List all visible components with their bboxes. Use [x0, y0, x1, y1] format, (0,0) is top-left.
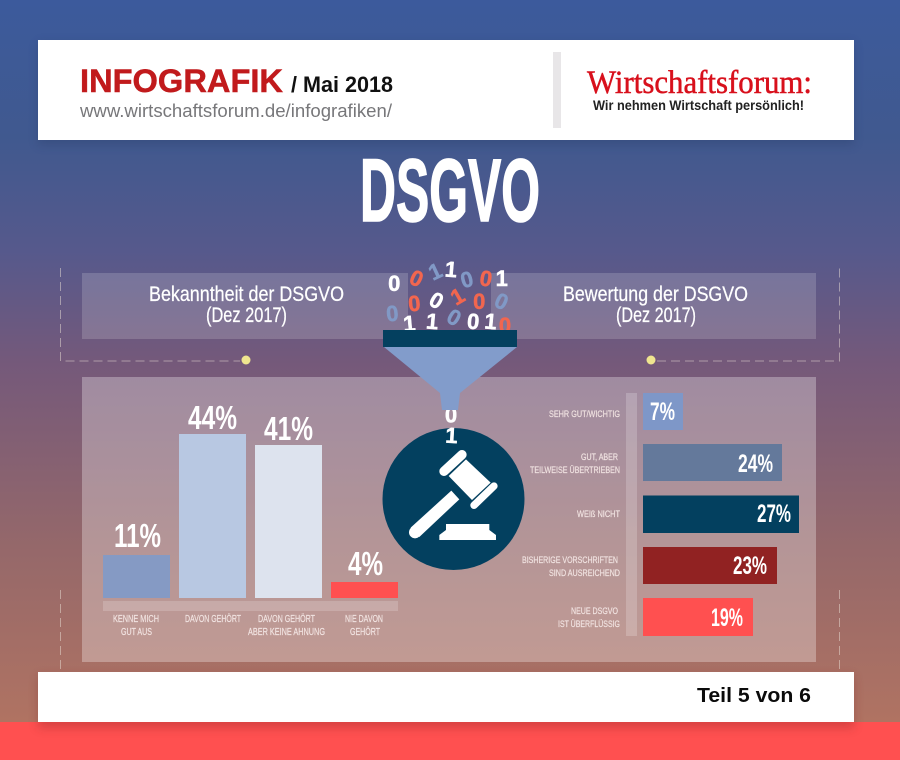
bar: davon gehört aber keine ahnung: 41% [264, 410, 313, 447]
binary digits above funnel: 0 [473, 289, 485, 314]
bar: davon gehört [179, 399, 246, 625]
falling digits: 0 [445, 402, 457, 427]
panel: heading left: (Dez 2017) [206, 304, 287, 327]
logo tagline: Wir nehmen Wirtschaft persönlich! [593, 97, 804, 113]
bar: gut, aber teilweise übertrieben: 24% [738, 450, 773, 478]
red footer band [0, 722, 900, 760]
icon: gavel [409, 455, 496, 540]
url: www.wirtschaftsforum.de/infografiken/ [79, 101, 392, 121]
binary digits above funnel: 0 [466, 309, 480, 334]
bar: neue dsgvo überflüssig: IST ÜBERFLÜSSIG [558, 619, 620, 630]
bar: weiß nicht [577, 496, 799, 533]
dashed connector lines [60, 265, 840, 672]
title: DSGVO [360, 140, 540, 240]
bar: neue dsgvo überflüssig [558, 598, 753, 636]
falling digits [446, 410, 457, 444]
binary digits above funnel: 0 [406, 265, 427, 292]
binary digits above funnel: 0 [388, 271, 400, 296]
bar: nie davon gehört: 4% [348, 545, 383, 582]
footer panel [38, 672, 854, 728]
binary digits above funnel: 0 [458, 266, 476, 293]
binary digits above funnel: 0 [499, 313, 511, 338]
bar: kenne mich gut aus: 11% [114, 517, 161, 554]
panel: chart area [82, 377, 816, 662]
bar: bisherige vorschriften: SIND AUSREICHEND [549, 568, 620, 579]
part indicator: Teil 5 von 6 [697, 685, 811, 707]
binary digits above funnel: 1 [446, 283, 469, 310]
heading: INFOGRAFIK: INFOGRAFIK [80, 63, 283, 99]
bar: nie davon gehört: GEHÖRT [350, 626, 380, 638]
bar: davon gehört: DAVON GEHÖRT [185, 613, 241, 625]
falling digits: 1 [445, 423, 458, 448]
binary digits above funnel: 0 [425, 287, 448, 314]
date: / Mai 2018 [291, 72, 393, 97]
bar: davon gehört aber keine ahnung: DAVON GEHÖRT [258, 613, 315, 625]
binary digits above funnel: 0 [407, 291, 422, 316]
binary digits above funnel: 1 [444, 257, 458, 282]
bar: kenne mich gut aus: KENNE MICH [113, 614, 159, 625]
bar: gut, aber teilweise übertrieben: TEILWEISE ÜBERTRIEBEN [530, 465, 620, 476]
bar: weiß nicht: 27% [757, 500, 791, 528]
panel: heading left [82, 273, 408, 339]
bar chart: Bekanntheit [103, 399, 398, 638]
binary digits above funnel: 0 [478, 265, 494, 292]
bar: davon gehört: 44% [188, 399, 237, 436]
panel: heading right [491, 273, 816, 339]
vertical axis strip [626, 393, 637, 636]
logo wordmark: Wirtschaftsforum: [587, 65, 812, 101]
bar: davon gehört aber keine ahnung [248, 410, 325, 638]
connector dot left [242, 356, 250, 364]
connector dot right [646, 356, 656, 364]
bar: neue dsgvo überflüssig: 19% [711, 604, 743, 632]
bar: gut, aber teilweise übertrieben: GUT, ABER [581, 452, 618, 463]
bar: nie davon gehört [331, 545, 398, 638]
bar: davon gehört aber keine ahnung: ABER KEINE AHNUNG [248, 627, 325, 638]
bar: bisherige vorschriften [522, 547, 777, 584]
panel: heading right: (Dez 2017) [616, 304, 696, 327]
bar: nie davon gehört: NIE DAVON [345, 614, 383, 625]
circle [382, 428, 524, 570]
binary digits above funnel: 1 [424, 258, 446, 285]
binary digits above funnel: 0 [491, 288, 512, 315]
bar: sehr gut: 7% [650, 398, 675, 426]
binary digits above funnel [386, 262, 510, 330]
binary digits above funnel: 1 [496, 266, 508, 291]
bar: sehr gut: SEHR GUT/WICHTIG [549, 409, 620, 420]
bar: bisherige vorschriften: 23% [733, 552, 767, 580]
binary digits above funnel: 1 [402, 311, 417, 336]
binary digits above funnel: 1 [425, 309, 439, 334]
binary digits above funnel: 0 [442, 304, 466, 331]
bar: neue dsgvo überflüssig: NEUE DSGVO [571, 606, 618, 617]
binary digits above funnel: 0 [385, 301, 400, 326]
bar chart: Bewertung [522, 393, 799, 636]
bar: bisherige vorschriften: BISHERIGE VORSCHRIFTEN [522, 555, 618, 566]
bar: weiß nicht: WEIß NICHT [577, 509, 620, 520]
chart baseline strip [103, 601, 398, 611]
header panel [38, 40, 854, 145]
binary digits above funnel: 1 [483, 309, 498, 334]
funnel [383, 330, 517, 410]
panel: heading left: Bekanntheit der DSGVO [149, 283, 344, 306]
bar: kenne mich gut aus: GUT AUS [121, 627, 152, 638]
bar: kenne mich gut aus [103, 517, 170, 638]
bar: sehr gut [549, 393, 683, 430]
header separator [553, 52, 561, 128]
panel: heading right: Bewertung der DSGVO [563, 283, 748, 306]
bar: gut, aber teilweise übertrieben [530, 444, 782, 481]
